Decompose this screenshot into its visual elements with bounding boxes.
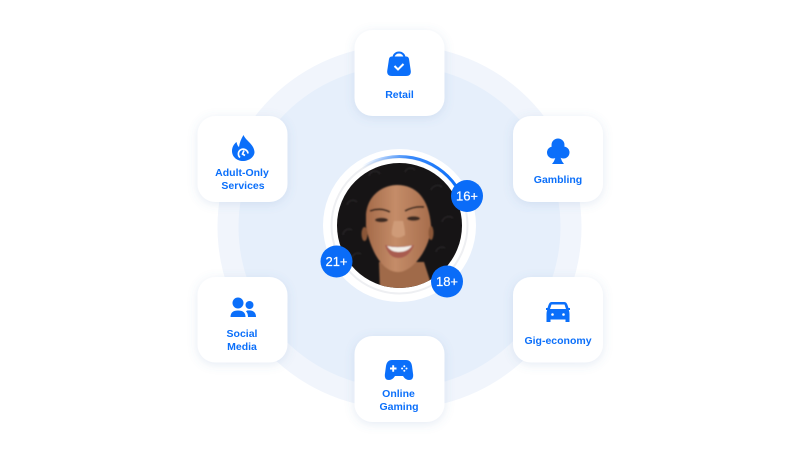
card: Social Media: Media (227, 341, 257, 353)
label: Retail (385, 89, 414, 101)
card: Social Media (198, 277, 288, 362)
card: Online Gaming (354, 336, 444, 422)
label: Gambling (534, 174, 582, 186)
central portrait (320, 149, 483, 302)
icon: game controller (385, 360, 413, 380)
icon: people (230, 298, 256, 317)
label: Adult-Only (215, 167, 269, 179)
progress ring (332, 156, 468, 294)
card: Retail (354, 30, 444, 116)
badge: 21+: 21+ (325, 254, 348, 269)
background rings (218, 45, 582, 409)
icon: car (546, 302, 570, 322)
badge: 16+ (451, 180, 483, 212)
card: Gig-economy (513, 277, 603, 362)
card: Adult-Only Services (198, 116, 288, 202)
white portrait ring (323, 149, 476, 302)
label: Gig-economy (524, 335, 592, 347)
badge: 16+: 16+ (456, 188, 478, 204)
icon: shopping bag (387, 52, 411, 76)
label: Online (382, 388, 415, 400)
icon: flame (232, 135, 254, 161)
card: Gambling (513, 116, 603, 202)
card: Adult-Only Services: Services (221, 180, 265, 192)
badge: 21+ (320, 246, 352, 278)
badge: 18+: 18+ (436, 274, 458, 289)
icon: club suit (547, 138, 570, 164)
portrait photo (337, 163, 462, 290)
label: Social (227, 328, 258, 340)
card: Online Gaming: Gaming (379, 401, 419, 413)
badge: 18+ (431, 266, 463, 298)
